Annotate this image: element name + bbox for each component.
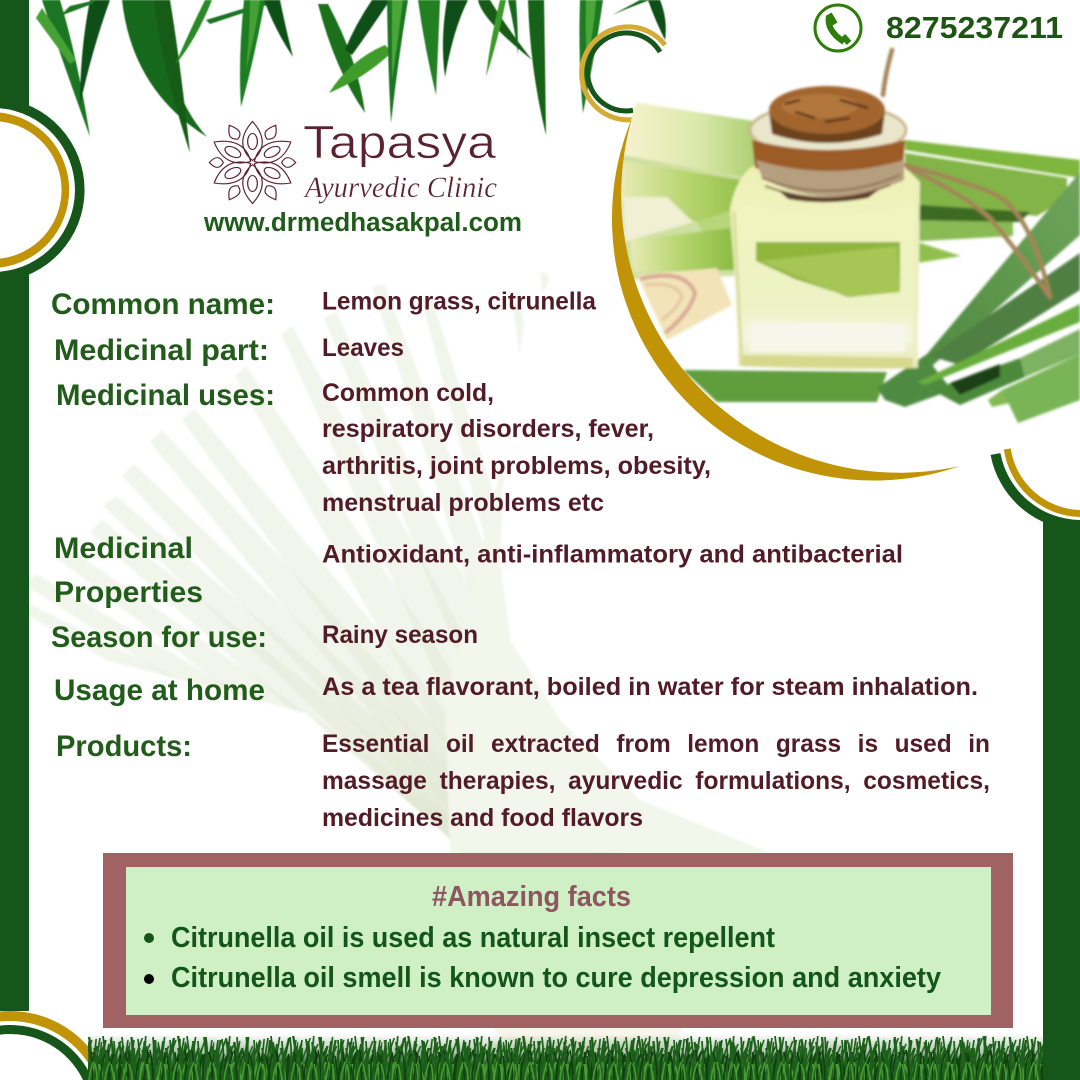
photo: cork (769, 86, 885, 143)
photo: twine (883, 50, 1050, 297)
label: season for use: Season for use: (51, 621, 267, 654)
left ring decoration (0, 98, 85, 282)
bullet 2 (144, 974, 154, 984)
right green side bar (1043, 521, 1080, 1080)
value: medicinal uses: menstrual problems etc (322, 489, 604, 517)
panel: amazing facts (103, 853, 1013, 1028)
value: medicinal uses: respiratory disorders, fever, (322, 415, 654, 443)
label: medicinal properties: Properties (54, 576, 203, 609)
grass strip at bottom (88, 1034, 1043, 1080)
value: common name: Lemon grass, citrunella (322, 288, 597, 316)
background: faded lemongrass stalks (22, 272, 770, 1050)
website: www.drmedhasakpal.com (203, 209, 522, 237)
photo: long leaf (683, 370, 887, 402)
value: products: massage therapies, ayurvedic formulations, cosmetics, (322, 767, 990, 795)
logo: flower mark (209, 122, 296, 204)
label: usage at home: Usage at home (54, 674, 265, 707)
phone number: 8275237211 (886, 10, 1063, 45)
label: medicinal properties (54, 532, 203, 609)
bottom-left ring decoration (0, 1011, 108, 1080)
fact 2: Citrunella oil smell is known to cure depression and anxiety (171, 962, 941, 994)
label: medicinal part: Medicinal part: (54, 334, 269, 367)
hanging leaves at top (36, 0, 666, 153)
left green side bar (0, 0, 29, 1040)
bullet 1 (144, 933, 154, 943)
logo: clinic subtitle: Ayurvedic Clinic (303, 171, 497, 204)
photo: glass jar (730, 162, 920, 370)
value: medicinal part: Leaves (322, 334, 404, 362)
value: medicinal uses: arthritis, joint problems, obesity, (322, 452, 711, 480)
value: products: medicines and food flavors (322, 804, 643, 832)
label: medicinal uses: Medicinal uses: (56, 379, 275, 412)
value: usage at home: As a tea flavorant, boiled in water for steam inhalation. (322, 673, 978, 701)
photo: cut leaves (877, 172, 1080, 423)
gold crescent around photo (612, 118, 960, 481)
panel frame (103, 853, 1013, 1028)
top arcs near photo (582, 27, 665, 120)
logo: clinic name: Tapasya (303, 116, 496, 168)
value: products: Essential oil extracted from lemon grass is used in (322, 730, 990, 758)
value: medicinal uses: Common cold, (322, 379, 494, 407)
photo: jar neck and rope (750, 104, 906, 202)
label: common name: Common name: (51, 288, 275, 321)
bottom-right arcs (996, 449, 1080, 525)
label: medicinal properties: Medicinal (54, 532, 193, 565)
value: products (322, 730, 990, 832)
photo: lemongrass oil jar (618, 50, 1080, 423)
fact 1: Citrunella oil is used as natural insect repellent (171, 922, 775, 954)
phone icon (815, 5, 861, 51)
label: products: Products: (56, 730, 192, 763)
photo: back stalks left (618, 102, 760, 280)
photo: back stalks right (905, 140, 1080, 265)
value: medicinal properties: Antioxidant, anti-inflammatory and antibacterial (322, 540, 903, 568)
value: medicinal uses (322, 379, 711, 517)
facts heading: #Amazing facts (432, 881, 631, 913)
value: season for use: Rainy season (322, 621, 478, 649)
panel background (126, 867, 991, 1015)
photo: cut lemongrass piece (637, 268, 732, 340)
